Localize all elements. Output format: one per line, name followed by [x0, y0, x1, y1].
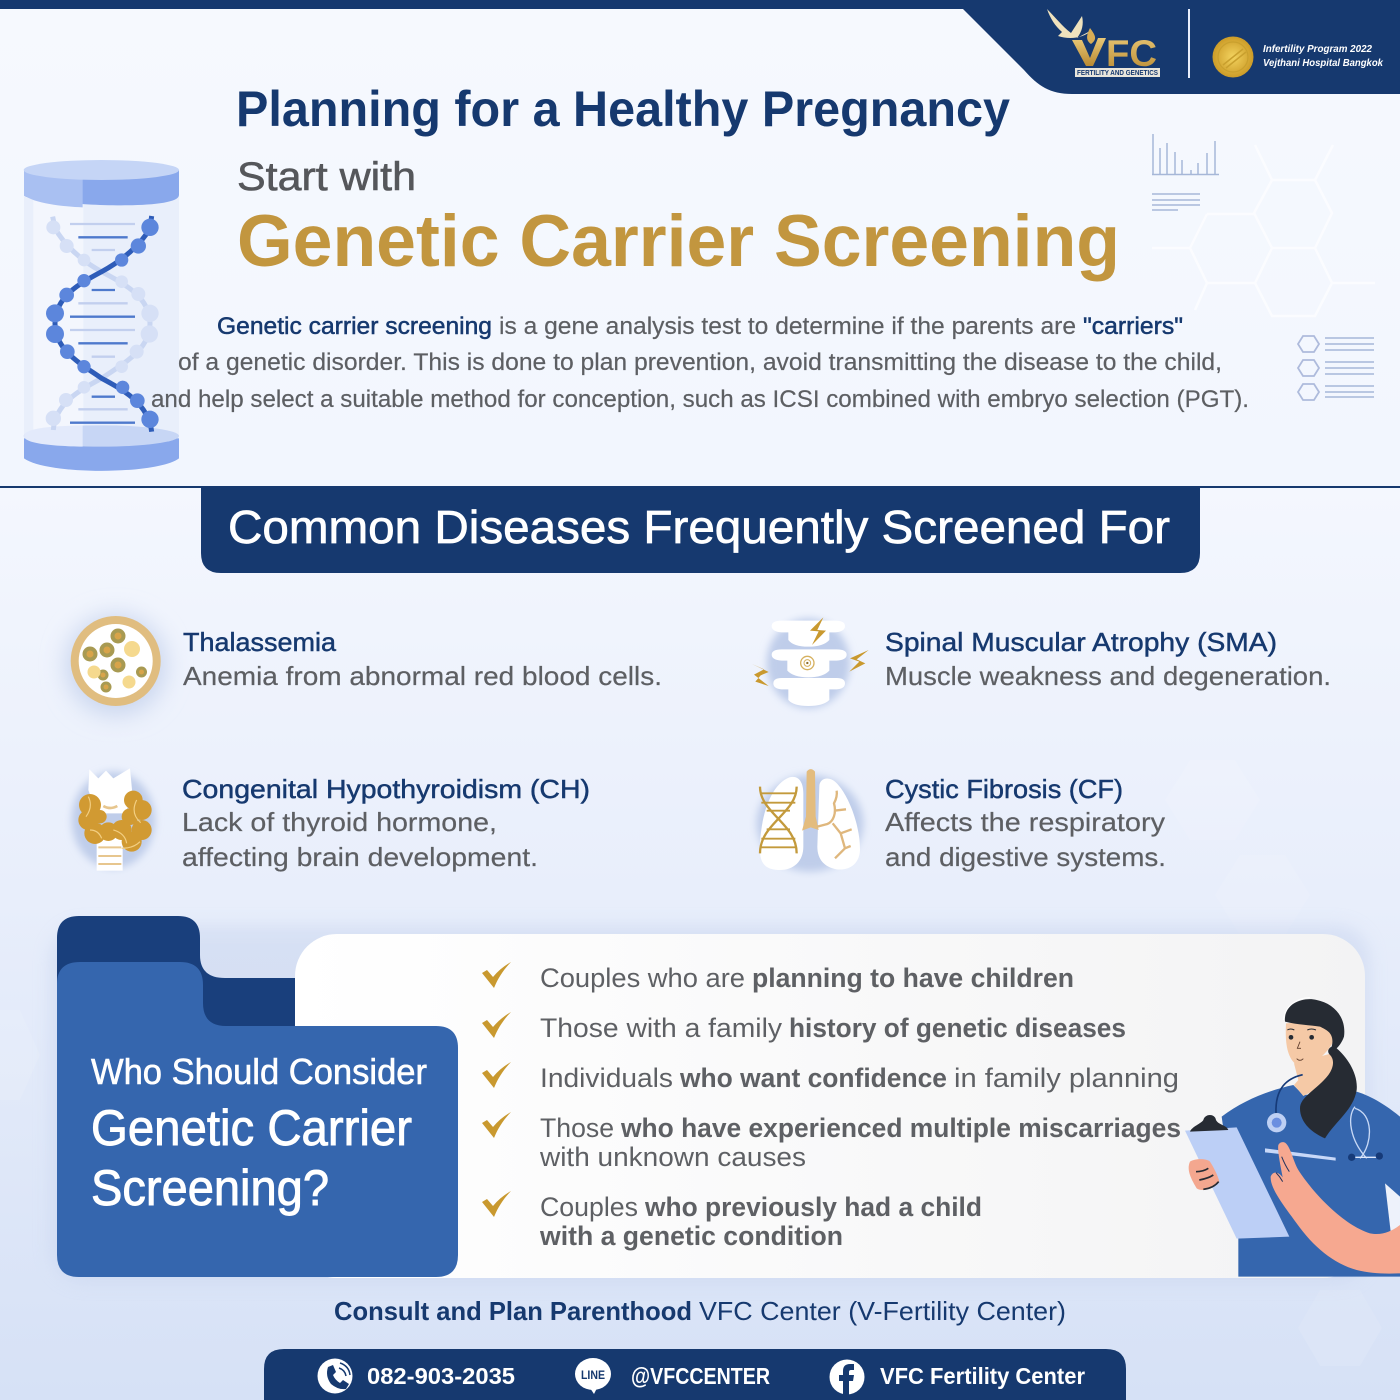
contact bar: @VFCCENTER	[631, 1363, 770, 1389]
checklist: planning to have children	[752, 963, 1074, 993]
checklist: with a genetic condition	[539, 1221, 843, 1251]
checklist: who have experienced multiple miscarriages	[620, 1113, 1181, 1143]
icon: Facebook	[830, 1360, 864, 1395]
disease: cystic fibrosis: Cystic Fibrosis (CF)	[885, 774, 1123, 804]
disease: congenital hypothyroidism	[72, 768, 590, 872]
icon: spine with lightning	[752, 617, 869, 708]
consult line	[334, 1296, 1066, 1326]
disease: congenital hypothyroidism: Congenital Hypothyroidism (CH)	[182, 774, 590, 804]
title: Planning for a Healthy Pregnancy	[236, 81, 1010, 137]
award text	[1263, 43, 1384, 69]
checklist	[482, 962, 1181, 1251]
checklist: who want confidence	[679, 1063, 947, 1093]
checklist: Couples	[540, 1192, 638, 1222]
checklist: Couples who are	[540, 963, 745, 993]
intro paragraph	[151, 313, 1249, 413]
consult line: Consult and Plan Parenthood	[334, 1296, 692, 1326]
disease: congenital hypothyroidism: Lack of thyroid hormone,	[182, 807, 497, 837]
panel: who should consider	[50, 916, 1370, 1283]
checklist: Individuals	[540, 1063, 673, 1093]
icon: VFC logo: FC	[1106, 33, 1157, 74]
soft shadow	[50, 925, 1370, 1283]
disease: congenital hypothyroidism: affecting brain development.	[182, 842, 538, 872]
disease: cystic fibrosis	[757, 769, 1166, 872]
upper background	[0, 0, 1400, 486]
checklist: who previously had a child	[644, 1192, 982, 1222]
disease: thalassemia: Thalassemia	[183, 627, 337, 657]
checklist: in family planning	[954, 1063, 1179, 1093]
checklist: Those with a family	[540, 1013, 783, 1043]
decoration: hexagon pattern and data graphics	[1152, 134, 1375, 400]
header bar with logos	[0, 0, 1400, 94]
consult line: VFC Center (V-Fertility Center)	[699, 1296, 1066, 1326]
folder heading	[91, 1051, 427, 1216]
disease: thalassemia	[66, 615, 662, 715]
disease: spinal muscular atrophy	[752, 617, 1331, 708]
intro paragraph: and help select a suitable method for conception, such as ICSI combined with embryo selection (PGT).	[151, 386, 1249, 413]
section divider line	[0, 486, 1400, 488]
icon: checks	[482, 962, 511, 1217]
subtitle: Start with	[237, 155, 416, 199]
intro paragraph: "carriers"	[1083, 313, 1183, 340]
icon: lungs and DNA	[757, 769, 863, 872]
award text: Infertility Program 2022	[1263, 43, 1372, 55]
illustration: nurse with clipboard	[1185, 997, 1400, 1277]
checklist: with unknown causes	[539, 1142, 806, 1172]
contact bar: 082-903-2035	[367, 1363, 515, 1389]
contact bar	[264, 1349, 1126, 1400]
icon: gold medal	[1212, 36, 1254, 78]
disease: cystic fibrosis: and digestive systems.	[885, 842, 1166, 872]
icon: DNA in a glass cylinder	[24, 160, 179, 471]
contact bar: VFC Fertility Center	[880, 1363, 1085, 1389]
folder heading: Genetic Carrier	[91, 1100, 412, 1156]
divider	[1188, 9, 1190, 78]
lower background	[0, 487, 1400, 1400]
checklist: Those	[540, 1113, 614, 1143]
icon: VFC logo: FERTILITY AND GENETICS	[1077, 70, 1158, 77]
section banner: common diseases	[201, 488, 1200, 573]
icon: blood cells	[66, 615, 166, 715]
folder front	[57, 962, 458, 1277]
main heading: Genetic Carrier Screening	[237, 201, 1120, 282]
disease: spinal muscular atrophy: Spinal Muscular Atrophy (SMA)	[885, 627, 1277, 657]
section banner: common diseases: Common Diseases Frequently Screened For	[228, 501, 1170, 553]
checklist: history of genetic diseases	[789, 1013, 1126, 1043]
icon: thyroid	[72, 768, 155, 871]
disease: cystic fibrosis: Affects the respiratory	[885, 807, 1165, 837]
icon: VFC logo	[1047, 9, 1160, 77]
folder heading: Who Should Consider	[91, 1051, 427, 1092]
panel: checklist card	[295, 934, 1365, 1278]
folder back tab	[57, 916, 295, 1030]
icon: LINE: LINE	[581, 1370, 605, 1382]
disease: thalassemia: Anemia from abnormal red blood cells.	[183, 661, 662, 691]
folder heading: Screening?	[91, 1160, 329, 1216]
icon: LINE	[575, 1358, 611, 1394]
disease: spinal muscular atrophy: Muscle weakness and degeneration.	[885, 661, 1331, 691]
intro paragraph: is a gene analysis test to determine if the parents are	[499, 313, 1076, 340]
intro paragraph: of a genetic disorder. This is done to plan prevention, avoid transmitting the disease to the child,	[178, 349, 1222, 376]
award text: Vejthani Hospital Bangkok	[1263, 57, 1384, 69]
icon: phone	[318, 1358, 352, 1394]
intro paragraph: Genetic carrier screening	[217, 313, 492, 340]
